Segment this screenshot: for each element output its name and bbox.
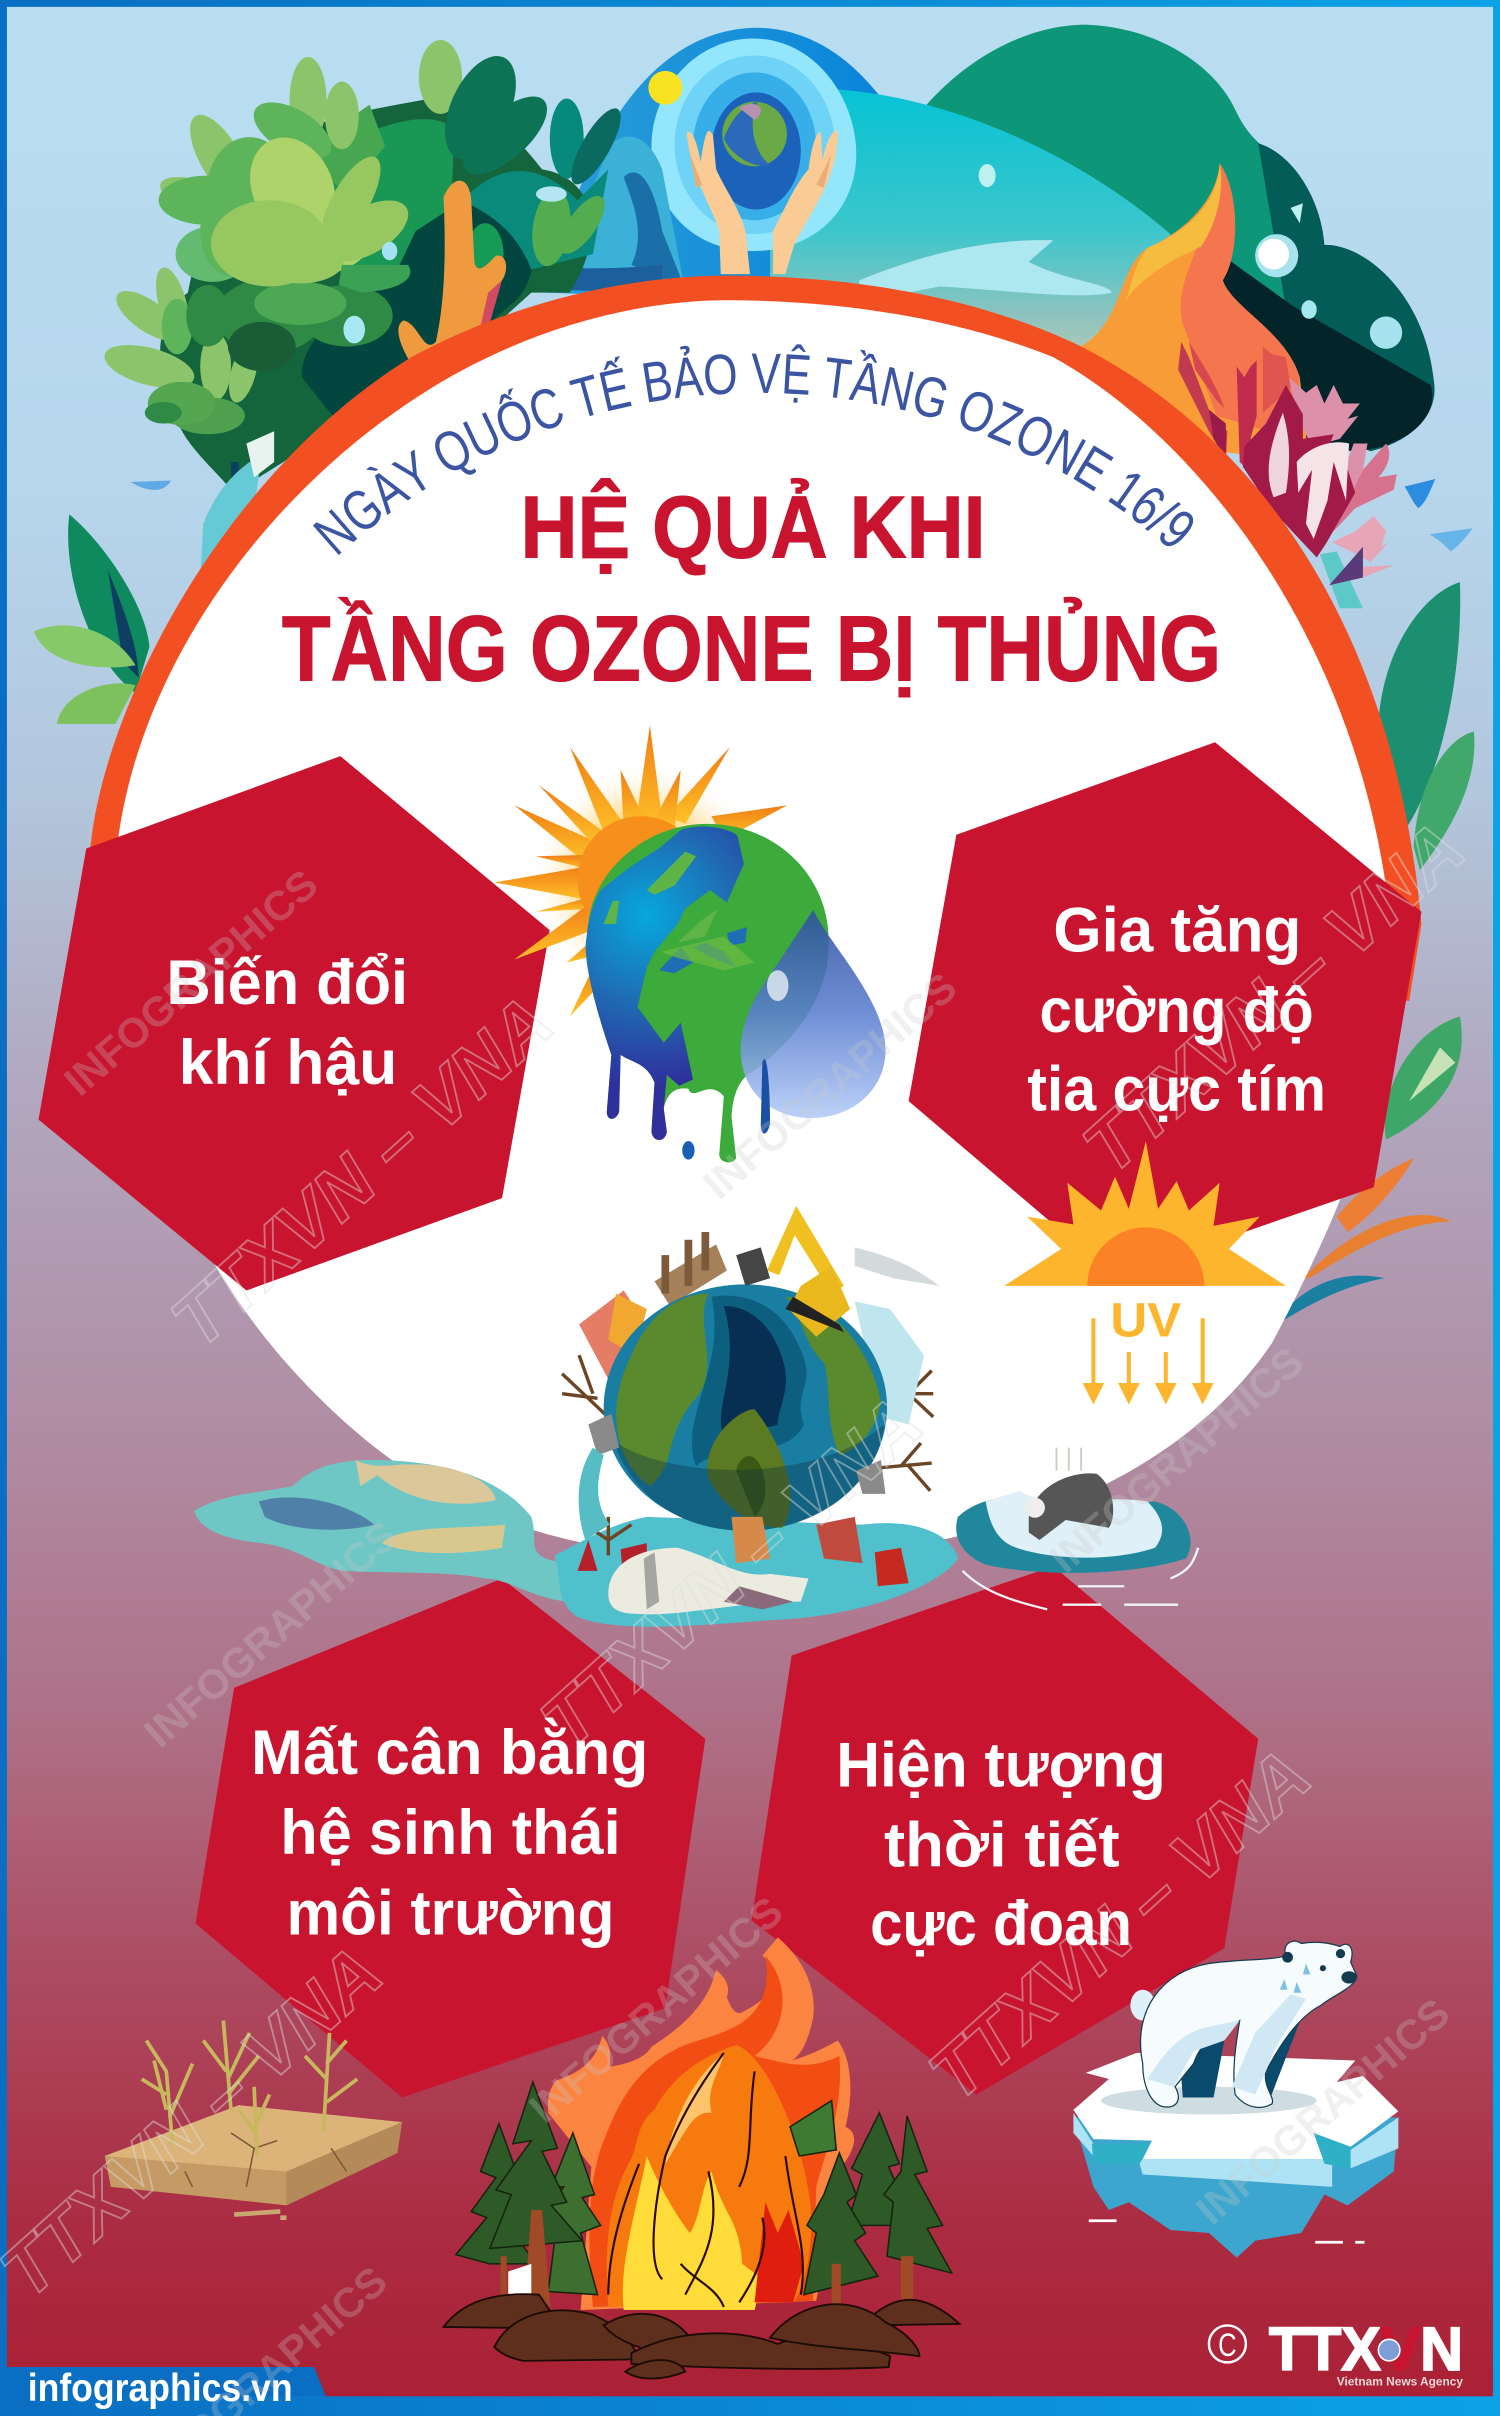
ring: orange arc [89,276,1421,1001]
icon: UV sun [1004,1141,1286,1405]
rocks [444,2294,959,2379]
illustration: flame [1078,163,1309,462]
hexagon: UV intensity: Gia tăng [1053,896,1301,966]
footer tab: infographics.vn [28,2367,293,2410]
title: TẦNG OZONE BỊ THỦNG [282,597,1221,701]
right leaves [1272,582,1474,1328]
logo: TTXVN [1269,2315,1463,2384]
icon: UV sun: UV [1110,1295,1181,1348]
illustration: blue dome [547,28,939,308]
illustration: coral [1178,342,1397,608]
left pond with fish [194,1460,573,1602]
hexagon: UV intensity [909,742,1421,1277]
watermarks: INFOGRAPHICS [1041,1337,1312,1582]
illustration: top scenery [34,25,1474,1328]
trees [456,2082,952,2295]
illustration: cracked earth with grass [105,2021,402,2218]
bubbles [979,164,1402,349]
watermarks [0,806,1480,2416]
illustration: polar bear on ice [1073,1941,1398,2258]
hexagon: extreme weather: cực đoan [870,1889,1132,1959]
dead trees, buildings and pipes [562,1337,933,1555]
penguin on ice [956,1448,1198,1609]
illustration: forest tree [100,40,630,578]
illustration: sea [770,88,1186,403]
pipe and water [588,1414,619,1455]
hexagon: extreme weather: Hiện tượng [836,1730,1166,1800]
hexagon: ecosystem imbalance [196,1579,705,2098]
hexagon: ecosystem imbalance: hệ sinh thái [280,1798,621,1868]
trash [578,1517,909,1586]
hexagon: climate change: Biến đổi [166,948,408,1018]
watermarks: INFOGRAPHICS [520,1887,791,2132]
illustration: hands holding earth [648,39,856,274]
illustration: forest fire [444,1937,959,2379]
illustration: blue cone [525,137,685,293]
logo: Vietnam News Agency [1337,2375,1463,2389]
watermarks: INFOGRAPHICS [55,860,326,1105]
illustration: dark teal hill [1232,143,1435,451]
excavator [736,1206,939,1337]
watermarks: TTXVN – VNA [913,1733,1326,2116]
watermarks: INFOGRAPHICS [1187,1989,1458,2234]
title: HỆ QUẢ KHI [521,478,986,576]
hexagon: UV intensity: tia cực tím [1027,1054,1326,1124]
footer tab [0,2367,1500,2416]
logo: C [1218,2327,1237,2363]
hexagon: ecosystem imbalance: môi trường [286,1878,614,1948]
illustration: polluted earth scene [194,1206,1198,1627]
earth [604,1284,887,1531]
illustration: green hill [924,25,1309,323]
hexagon: extreme weather [752,1566,1258,2094]
hexagon: UV intensity: cường độ [1040,976,1314,1046]
hexagon: climate change: khí hậu [179,1028,397,1098]
small blue shapes [131,479,1472,551]
watermarks: TTXVN – VNA [525,1380,938,1763]
watermarks: INFOGRAPHICS [694,963,966,1208]
hexagon: extreme weather: thời tiết [884,1811,1120,1881]
hexagon: ecosystem imbalance: Mất cân bằng [251,1717,648,1788]
watermarks: INFOGRAPHICS [135,1512,406,1756]
illustration: orange coral stem [398,181,506,367]
icon: melting earth with sun [494,725,886,1162]
watermarks: TTXVN – VNA [1067,806,1480,1189]
subtitle: curved: NGÀY QUỐC TẾ BẢO VỆ TẦNG OZONE 16/9 [313,344,1194,555]
hexagon: climate change [39,756,550,1291]
panel: white egg [115,300,1391,1559]
seal [608,1548,809,1614]
flames [548,1937,854,2310]
title [282,478,1221,701]
watermarks: TTXVN – VNA [155,980,568,1363]
center pond [554,1517,958,1627]
left leaves [34,514,149,724]
